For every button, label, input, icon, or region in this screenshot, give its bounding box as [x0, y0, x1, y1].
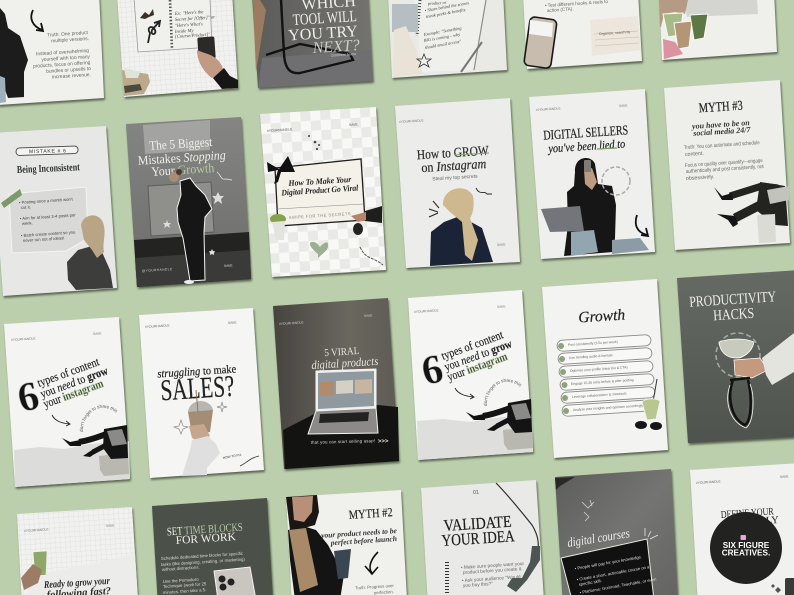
- note text: • Aim for at least 3-4 posts per: [20, 212, 76, 221]
- icon: star: [417, 54, 431, 67]
- subheading: Steal my top secrets: [432, 174, 478, 182]
- note text: [19, 196, 76, 243]
- card: six types center: [408, 290, 536, 464]
- subheading: perfect before launch: [329, 534, 397, 547]
- save: SAVE: [497, 242, 506, 247]
- tag: MISTAKE # 6: [29, 148, 67, 155]
- photo: tan backdrop: [253, 0, 266, 72]
- swipe label: SWIPE FOR THE SECRETS: [289, 211, 351, 220]
- card: truth one product: [0, 0, 104, 105]
- photo: shopping bag: [757, 214, 776, 243]
- note text: week.: [22, 220, 33, 226]
- heading: YOU TRY: [288, 23, 359, 44]
- caption: that you can start selling asap!: [311, 438, 375, 445]
- heading: The 5 Biggest: [149, 134, 213, 153]
- photo: handset: [507, 546, 540, 592]
- photo: woman in black: [288, 526, 345, 595]
- card: ready to grow: [17, 507, 138, 595]
- stars cluster: [308, 135, 320, 150]
- heading: [416, 143, 489, 175]
- truth text: multiple versions.: [51, 36, 89, 44]
- heading: [689, 289, 777, 324]
- arrow: [240, 456, 259, 466]
- ground band: [134, 232, 251, 287]
- subheading: your product needs to be: [320, 526, 398, 540]
- handle: #YOURHANDLE: [267, 127, 293, 133]
- ribbon: [730, 378, 751, 425]
- icon: squiggle arrow: [476, 188, 492, 194]
- handle: #YOURHANDLE: [279, 320, 305, 326]
- truth text: [355, 583, 395, 595]
- bullet text: • Create a short, actionable course on a: [576, 564, 650, 582]
- notes text: Example: "Something: [422, 25, 463, 37]
- torn paper: [14, 441, 130, 487]
- photo: hand: [659, 0, 688, 27]
- photo: cash stack: [122, 68, 150, 96]
- checklist text: Engage 15-30 mins before & after posting: [571, 378, 634, 386]
- circular text: [716, 333, 760, 377]
- chevrons: >>>: [378, 439, 389, 445]
- card: go viral: [260, 107, 386, 277]
- checklist text: Post consistently (3-5x per week): [568, 340, 618, 347]
- card: myth 2: [286, 490, 407, 595]
- save: SAVE: [106, 523, 115, 528]
- number 6: 6: [13, 372, 43, 421]
- paper panel: [684, 0, 758, 17]
- truth text: bundles or upsells to: [46, 66, 91, 75]
- note text: • Batch create content so you: [21, 229, 76, 238]
- notes text: sneak peeks & benefits: [425, 7, 466, 19]
- card: productivity hacks: [677, 270, 794, 443]
- heading: struggling to make: [157, 363, 237, 381]
- body text: authentically and post consistently, not: [686, 164, 764, 175]
- handle: #YOURHANDLE: [399, 118, 425, 124]
- photo: face: [292, 496, 313, 522]
- photo: woman with braid: [430, 188, 493, 266]
- photo: glass and hand: [719, 333, 794, 385]
- card: which tool: [252, 0, 373, 88]
- body text: tasks (like designing, creating, or marketing): [161, 557, 246, 567]
- photo: crossed legs: [714, 182, 789, 227]
- table: [283, 405, 399, 469]
- headline: [280, 175, 359, 198]
- note text: • Posting once a month won't: [19, 196, 74, 205]
- body text: Use the Pomodoro: [163, 577, 199, 584]
- bullet text: product before you create it.: [463, 566, 523, 576]
- heading: MYTH #3: [698, 98, 743, 115]
- icon: curly arrow: [31, 10, 43, 31]
- notebook: [134, 0, 212, 52]
- pink flower: [663, 39, 683, 59]
- heading: [137, 134, 227, 179]
- phone cord: [496, 483, 538, 552]
- icon: heart: [310, 242, 328, 258]
- notebook text: Inside My: [174, 29, 195, 35]
- doodle loops: [360, 247, 383, 265]
- body text: Technique (work for 25: [163, 581, 207, 589]
- icon: squiggle arrow: [148, 21, 160, 43]
- card: six types left: [4, 317, 132, 490]
- save: SAVE: [497, 304, 506, 309]
- heading: [441, 512, 515, 550]
- heading: MYTH #2: [348, 505, 393, 522]
- heading: Being Inconsistent: [17, 162, 80, 176]
- notebook text: "Here's What's: [175, 22, 203, 29]
- card: notebook with phone: [117, 0, 238, 97]
- pen: [461, 42, 482, 72]
- handle: #YOURHANDLE: [536, 106, 562, 112]
- badge icon: [740, 535, 746, 540]
- photo: woman with laptop: [541, 158, 616, 256]
- bullet text: you buy this?": [463, 581, 493, 589]
- photo: green drink and hand: [21, 551, 47, 590]
- subheading: [691, 118, 752, 138]
- card: mistake 6: [0, 126, 117, 296]
- icon: bow: [267, 156, 295, 184]
- headline: types of content: [439, 327, 506, 363]
- photo: iced coffee: [188, 390, 213, 442]
- heading: HACKS: [713, 306, 755, 324]
- card: test hooks: [523, 0, 642, 69]
- save: SAVE: [93, 331, 102, 336]
- body text: without distractions.: [162, 565, 200, 572]
- bullet text: [574, 554, 657, 595]
- notebook page: [414, 0, 486, 72]
- body text: Focus on quality over quantity—engage: [685, 158, 763, 169]
- handle: #YOURHANDLE: [696, 479, 722, 485]
- bullet text: • Ask your audience "Would: [462, 574, 521, 584]
- photo: woman in black: [169, 169, 212, 284]
- notes text: should email access": [424, 39, 462, 50]
- card: time blocks: [152, 498, 273, 595]
- curved reminder: don't forget to share this: [80, 404, 118, 432]
- truth text: products, focus on offering: [33, 60, 91, 70]
- sunglasses: [635, 421, 662, 430]
- laptop: [308, 369, 378, 434]
- save: SAVE: [619, 103, 628, 108]
- handle: #YOURHANDLE: [145, 323, 171, 329]
- stars: [174, 402, 227, 434]
- card: five biggest mistakes: [126, 117, 251, 287]
- card: digital courses: [555, 469, 678, 595]
- photo: phone: [214, 567, 256, 595]
- headline: types of content: [35, 354, 102, 390]
- squiggle: [217, 172, 232, 180]
- heading: [166, 522, 243, 547]
- checklist text: Analyze your insights and optimize accordingly: [573, 403, 644, 412]
- checklist dots: [558, 343, 569, 414]
- photo: chair frame: [266, 0, 353, 73]
- dark corner: [555, 477, 575, 490]
- card: growth checklist: [542, 279, 668, 458]
- note text: cut it.: [21, 204, 31, 210]
- heading: digital courses: [566, 525, 631, 550]
- save: SAVE: [364, 313, 373, 318]
- matcha cup: [642, 379, 660, 420]
- icons: stars: [163, 192, 224, 255]
- body text: minutes, then take a 5-: [163, 587, 207, 595]
- photo: woman in black blazer: [0, 8, 28, 98]
- save: SAVE: [349, 122, 359, 127]
- heading: Mistakes Stopping: [137, 147, 227, 168]
- tag: [16, 146, 78, 156]
- heading: SALES?: [159, 370, 235, 407]
- sofa: [612, 238, 649, 254]
- headline: you need to grow: [442, 336, 514, 374]
- subheading: social media 24/7: [692, 125, 752, 138]
- handle: #YOURHANDLE: [11, 336, 37, 342]
- circular text: [602, 167, 630, 195]
- badge: six figure creatives: [710, 512, 782, 584]
- truth text: Truth: Progress over: [355, 583, 395, 591]
- photo: mug: [334, 549, 351, 579]
- heading: TOOL WILL: [292, 8, 357, 29]
- notebook text: [Course/Product]": [175, 33, 210, 40]
- icon: stars: [140, 9, 154, 19]
- body text: content.: [685, 151, 704, 158]
- heading: Your Growth: [151, 160, 215, 179]
- card: struggling to make sales: [139, 308, 264, 478]
- body text: Schedule dedicated time blocks for specific: [161, 551, 244, 561]
- burst lines: [645, 528, 658, 539]
- ribbon highlight: [728, 384, 753, 428]
- heading: 5 VIRAL: [324, 346, 360, 359]
- truth text: Instead of overwhelming: [36, 48, 89, 57]
- card: how to grow: [395, 98, 520, 268]
- card: drinks: [659, 0, 777, 60]
- checklist text: [568, 340, 644, 412]
- notebook text: Ex: "Here's the: [174, 10, 204, 17]
- lower window: [148, 182, 214, 236]
- notes text: [422, 0, 470, 50]
- bullet text: [461, 561, 525, 589]
- heading: [43, 576, 111, 595]
- body text: obsessively.: [686, 174, 715, 182]
- photo: woman in shirt: [182, 436, 220, 476]
- notebook text: [174, 10, 215, 40]
- heading: VALIDATE: [443, 512, 512, 535]
- sticky note: Organize, search by: [599, 30, 631, 36]
- headline: your instagram: [445, 349, 509, 384]
- torn note: [1, 187, 88, 253]
- headline: [439, 327, 514, 384]
- frame: [275, 159, 365, 226]
- truth text: [33, 30, 91, 81]
- bullet text: • Platforms: Gumroad, Teachable, or even: [579, 576, 657, 595]
- heading: Ready to grow your: [43, 576, 111, 591]
- photo: woman from behind: [67, 215, 113, 290]
- comment text: Comment below: [331, 52, 357, 58]
- hand with sunglasses: [351, 206, 382, 235]
- bullet text: [545, 0, 609, 13]
- spiral: [417, 0, 420, 36]
- photo: folder: [289, 528, 318, 592]
- body text: [161, 551, 246, 595]
- photo: woman in white: [392, 4, 422, 77]
- floor: [258, 50, 373, 88]
- body text: [684, 140, 764, 182]
- note text: never run out of ideas!: [23, 235, 65, 243]
- heading: FOR WORK: [175, 531, 237, 547]
- notes text: • Share behind the scenes: [424, 0, 470, 13]
- heading: you've been lied to: [547, 137, 626, 156]
- truth text: increase revenue.: [52, 72, 91, 81]
- heading: CLEARLY: [731, 515, 780, 529]
- save: SAVE: [228, 320, 237, 325]
- headline: How To Make Your: [287, 175, 352, 188]
- curved reminder: don't forget to share this: [484, 378, 522, 406]
- subheading: [320, 526, 398, 547]
- heading: [288, 0, 360, 57]
- truth text: yourself with too many: [41, 54, 91, 63]
- heading: NEXT?: [311, 37, 360, 57]
- notes text: BIG is coming – why: [423, 32, 460, 43]
- upper window: [143, 120, 210, 154]
- number 6: 6: [417, 345, 447, 394]
- heading: [311, 346, 379, 372]
- heading: How to GROW: [416, 143, 489, 162]
- icon: burst lines: [429, 201, 439, 217]
- icon: arrow: [365, 552, 378, 574]
- photo: drinks: [663, 13, 708, 49]
- heading: SET TIME BLOCKS: [166, 522, 243, 538]
- body text: Truth: You can automate and schedule: [684, 140, 760, 151]
- heading: DIGITAL SELLERS: [543, 122, 629, 143]
- icon: sparkles: [582, 500, 594, 521]
- pavement: [135, 250, 251, 287]
- headline: Digital Product Go Viral: [280, 183, 359, 198]
- photo: phone corner: [785, 578, 794, 595]
- card: validate your idea: [421, 480, 544, 595]
- how to fix label: HOW TO FIX: [222, 453, 243, 460]
- stars: [771, 584, 781, 593]
- card: notebook strategy: [388, 0, 507, 78]
- checklist text: Optimize your profile (clear bio & CTA): [570, 365, 628, 373]
- headline: [35, 354, 110, 411]
- notebook text: Secret for [Offer]" or: [175, 15, 215, 23]
- heading: [157, 363, 237, 407]
- icon: arrow: [52, 415, 70, 426]
- bullet text: action (CTA).: [547, 6, 574, 13]
- heading: [543, 122, 629, 156]
- card: five viral digital products: [273, 298, 399, 469]
- matcha cup: [270, 214, 286, 240]
- checklist text: Leverage collaborations & shoutouts: [572, 391, 627, 399]
- checklist text: Use trending audio & formats: [569, 353, 613, 360]
- spiral: [445, 562, 449, 595]
- icon: phone: [524, 16, 557, 69]
- photo: hair: [286, 495, 319, 530]
- step number: 01: [473, 490, 479, 496]
- photo: hand with phone: [197, 36, 238, 89]
- card: digital sellers: [529, 89, 655, 259]
- tablet: [561, 539, 654, 595]
- checklist pills: [557, 334, 656, 417]
- bullet text: • People will pay for your knowledge.: [574, 554, 642, 571]
- bullet text: specific skill.: [578, 578, 602, 587]
- heading: [720, 507, 780, 529]
- truth text: Truth: One product: [47, 30, 89, 39]
- handle: #YOURHANDLE: [24, 527, 50, 533]
- heading: Growth: [578, 307, 626, 327]
- photo: woman on chair: [62, 425, 129, 476]
- torn paper: [417, 414, 533, 460]
- save: SAVE: [780, 474, 789, 479]
- save: SAVE: [224, 263, 233, 268]
- icon: arrow: [455, 388, 474, 399]
- handle: @YOURHANDLE: [142, 267, 173, 273]
- subheading: you have to be on: [691, 118, 751, 131]
- torn paper: [25, 553, 138, 595]
- bullet text: • Make sure people want your: [461, 561, 525, 571]
- headline: you need to grow: [38, 363, 110, 401]
- heading: digital products: [311, 354, 379, 372]
- photo: woman on chair: [466, 399, 533, 450]
- photo: jeans: [0, 76, 6, 103]
- badge text: SIX FIGURE: [723, 541, 770, 550]
- card: myth 3: [664, 80, 790, 250]
- heading: on Instagram: [421, 156, 487, 175]
- headline: your instagram: [41, 376, 105, 411]
- card: define your: [690, 463, 794, 595]
- handle: #YOURHANDLE: [414, 308, 440, 314]
- heading: YOUR IDEA: [441, 526, 515, 550]
- icon: arrow: [636, 215, 648, 236]
- badge text: [722, 541, 770, 558]
- heading: DEFINE YOUR: [720, 507, 774, 521]
- badge text: CREATIVES.: [722, 548, 770, 558]
